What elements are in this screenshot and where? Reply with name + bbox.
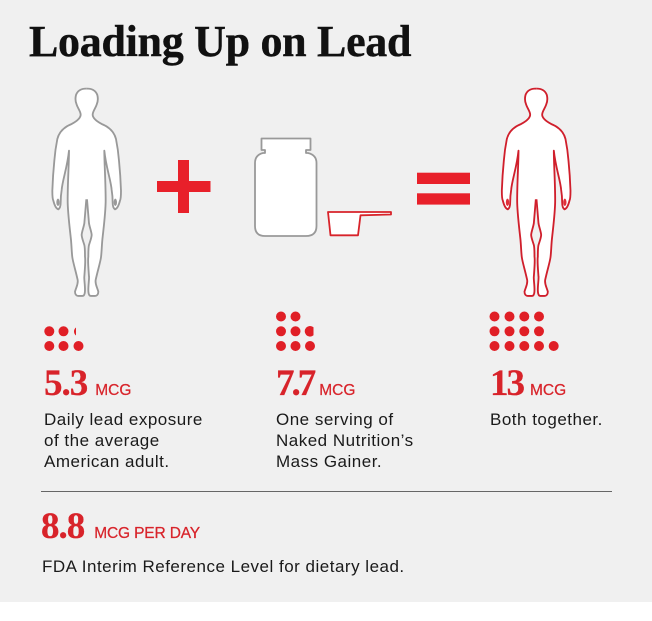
stat: 13 mcg: 13 MCG xyxy=(490,363,566,404)
text: one serving: Mass Gainer. xyxy=(276,452,382,471)
text: daily lead exposure xyxy=(44,410,203,471)
divider xyxy=(41,491,612,492)
text: daily lead exposure: of the average xyxy=(44,431,160,450)
text: daily lead exposure: American adult. xyxy=(44,452,170,471)
title: Loading Up on Lead xyxy=(29,17,411,66)
text: one serving: Naked Nutrition’s xyxy=(276,431,414,450)
icon: red scoop xyxy=(328,212,391,235)
icon: red human figure xyxy=(502,89,570,296)
icon: gray human figure xyxy=(52,89,121,296)
dots: 13 mcg xyxy=(490,312,559,351)
text: FDA reference level: FDA Interim Reference Level for dietary lead. xyxy=(42,557,405,576)
text: daily lead exposure: Daily lead exposure xyxy=(44,410,203,429)
text: one serving xyxy=(276,410,414,471)
dots: 5.3 mcg xyxy=(44,326,84,351)
icon: supplement jar xyxy=(255,138,316,236)
stat: 8.8 mcg per day: 8.8 MCG PER DAY xyxy=(41,506,200,547)
text: both together: Both together. xyxy=(490,410,603,429)
dots: 7.7 mcg xyxy=(276,312,315,351)
stat: 7.7 mcg: 7.7 MCG xyxy=(276,363,355,404)
icon: equals sign xyxy=(417,173,470,205)
text: one serving: One serving of xyxy=(276,410,394,429)
stat: 5.3 mcg: 5.3 MCG xyxy=(44,363,131,404)
icon: plus sign xyxy=(157,160,210,213)
